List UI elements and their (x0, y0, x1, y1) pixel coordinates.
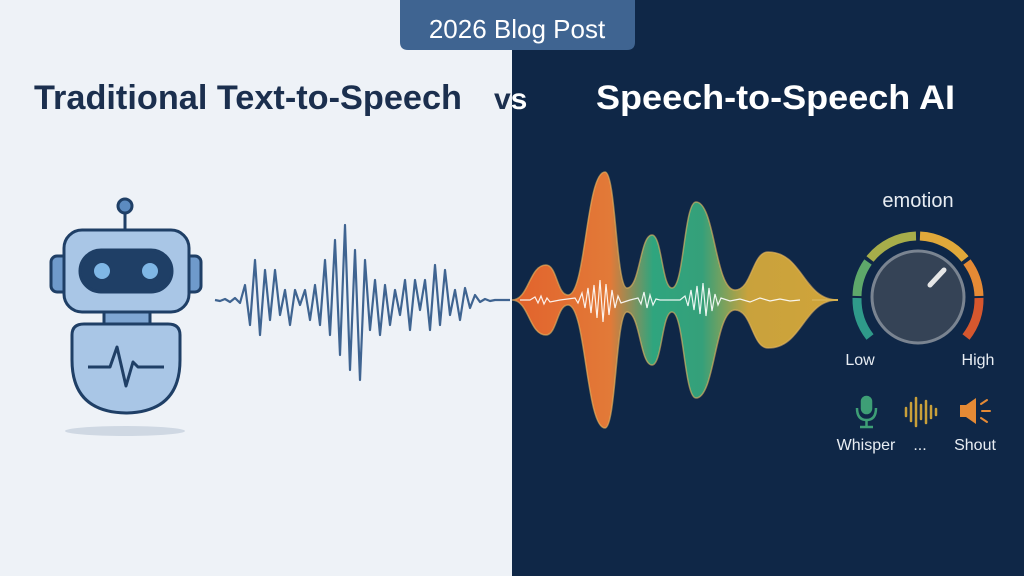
dial: emotion knob (857, 236, 979, 343)
label: Shout: Shout (954, 437, 996, 454)
waveform noise detail (520, 280, 800, 322)
label: Whisper: Whisper (837, 437, 896, 454)
badge: 2026 Blog Post (400, 0, 635, 50)
icon: robot (51, 199, 201, 436)
label: Low: Low (845, 352, 875, 369)
icon: sound bars (906, 398, 936, 426)
vs: vs (494, 83, 527, 116)
label: ellipsis: ... (913, 437, 927, 454)
title left: Traditional Text-to-Speech (34, 79, 462, 117)
chart: expressive waveform (512, 172, 838, 428)
label: emotion: emotion (882, 190, 954, 212)
title right: Speech-to-Speech AI (596, 79, 955, 117)
vs: vs (494, 83, 527, 116)
vs (494, 93, 526, 110)
right panel background (512, 0, 1024, 576)
icon: microphone (857, 397, 876, 427)
label: High: High (962, 352, 994, 369)
left panel background (0, 0, 512, 576)
badge: 2026 Blog Post: 2026 Blog Post (429, 14, 606, 44)
chart: flat robotic waveform (215, 225, 510, 380)
icon: speaker (960, 398, 990, 424)
